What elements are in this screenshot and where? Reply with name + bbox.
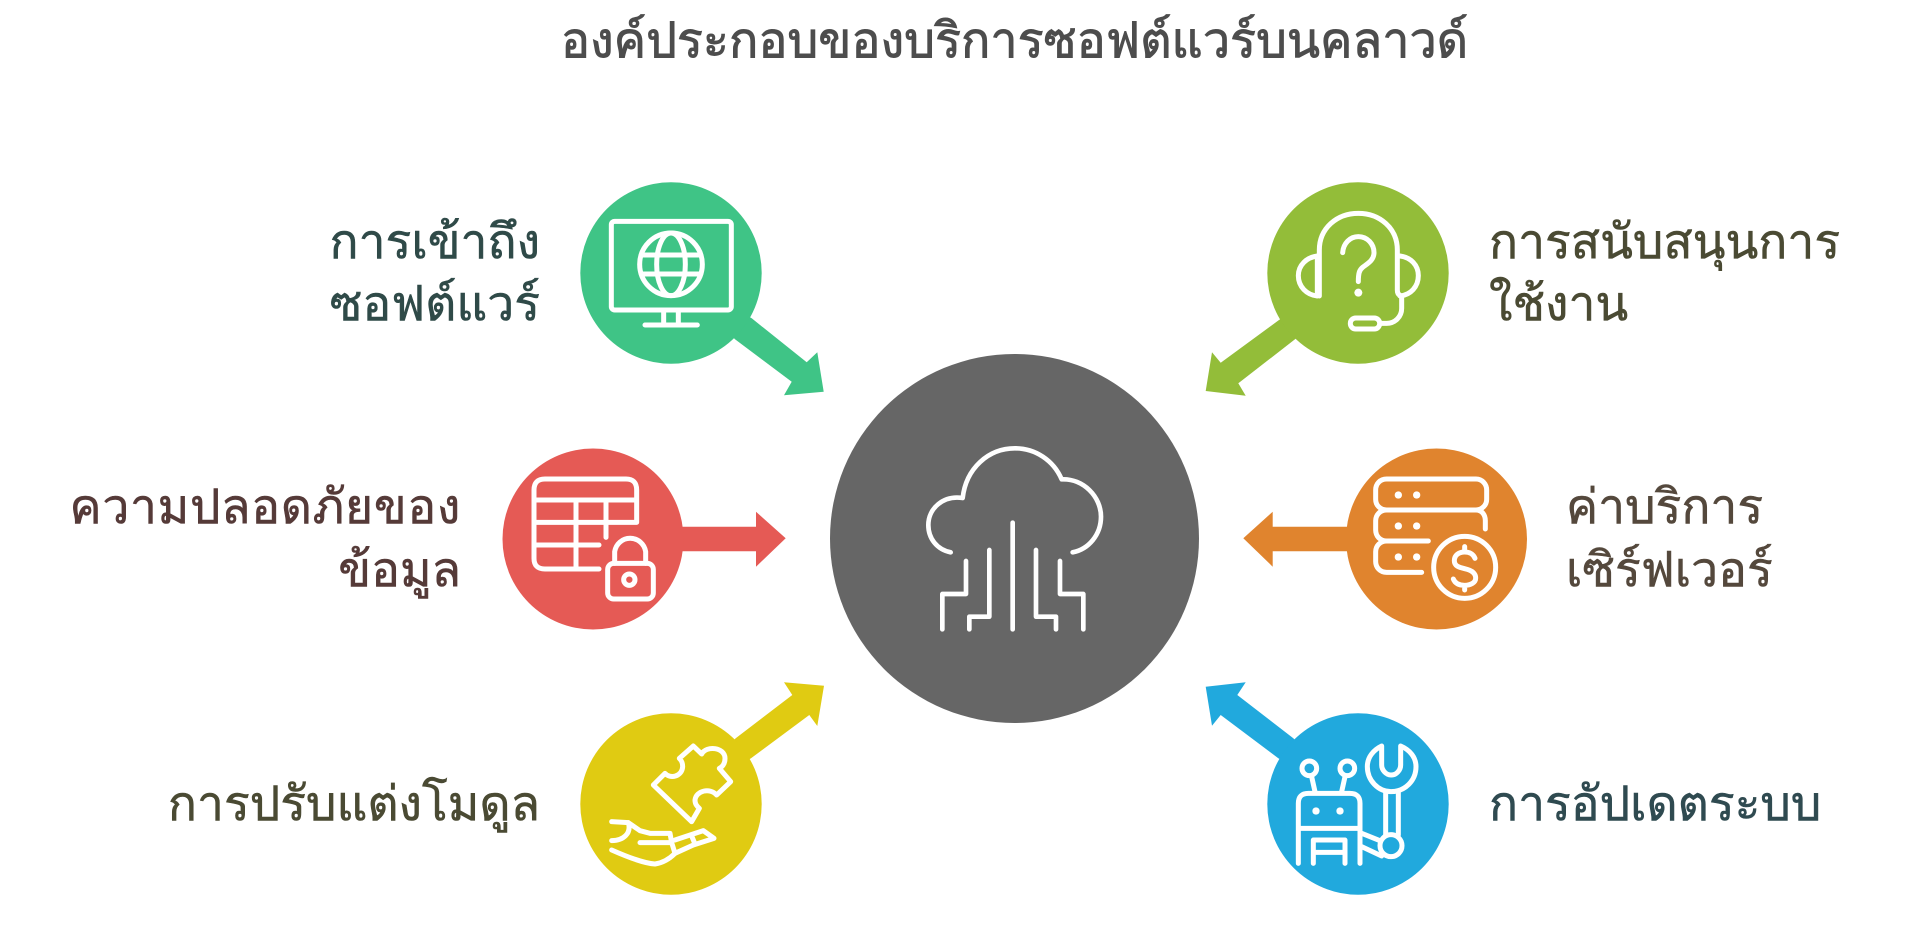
label: usage support: การสนับสนุนการ xyxy=(1489,216,1840,271)
label: data security: ความปลอดภัยของ xyxy=(70,481,461,534)
item: data security (red) xyxy=(70,448,786,630)
icon: hand and puzzle piece xyxy=(612,746,731,864)
label: software access: ซอฟต์แวร์ xyxy=(330,278,540,331)
label: module customization: การปรับแต่งโมดูล xyxy=(168,776,540,833)
item: system update (blue) xyxy=(1206,682,1821,895)
label: data security: ข้อมูล xyxy=(338,544,461,599)
label: software access: การเข้าถึง xyxy=(330,216,540,269)
label: usage support: ใช้งาน xyxy=(1489,276,1628,331)
icon: table with padlock xyxy=(534,479,653,599)
item: software access (green) xyxy=(330,182,824,395)
item: module customization (yellow) xyxy=(168,682,824,895)
icon: robot with wrench xyxy=(1298,746,1416,863)
label: server service fee: เซิร์ฟเวอร์ xyxy=(1566,544,1773,597)
icon: monitor with globe xyxy=(611,221,731,325)
label: system update: การอัปเดตระบบ xyxy=(1489,778,1821,831)
label: server service fee: ค่าบริการ xyxy=(1566,481,1763,534)
item: server service fee (orange) xyxy=(1243,448,1773,630)
item: usage support (lime) xyxy=(1206,182,1840,396)
icon: server stack with dollar coin xyxy=(1376,479,1496,598)
icon: headset with question mark xyxy=(1298,213,1418,329)
icon: cloud with circuit lines xyxy=(928,448,1101,629)
title: องค์ประกอบของบริการซอฟต์แวร์บนคลาวด์ xyxy=(561,14,1468,68)
central hub: cloud circle xyxy=(830,354,1199,723)
